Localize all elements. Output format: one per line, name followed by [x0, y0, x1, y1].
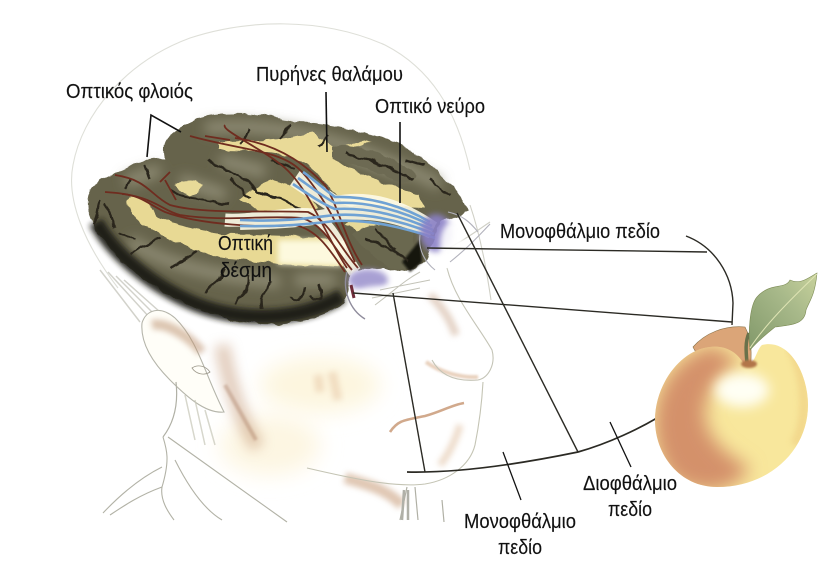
mouth: [390, 403, 464, 432]
stem hollow: [741, 360, 757, 368]
white matter: left finger: [175, 182, 412, 234]
eye socket sketch: [445, 205, 491, 300]
brain cross-section: [87, 113, 468, 324]
label: binocular field: Διοφθάλμιο: [583, 472, 677, 495]
head illustration: [72, 24, 493, 522]
label: optic tract: Οπτική: [218, 232, 273, 255]
inner gyrus: [333, 145, 418, 182]
dark eye hollow: [402, 240, 422, 272]
blue optic nerve fibres: [240, 172, 435, 238]
brain silhouette: [87, 113, 468, 324]
label: visual cortex: Οπτικός φλοιός: [66, 80, 193, 103]
label: thalamic nuclei: Πυρήνες θαλάμου: [256, 63, 403, 86]
back hump: [693, 327, 751, 370]
gyri highlights: [125, 127, 440, 282]
brown thalamic fibres: [105, 125, 362, 272]
leaf: [749, 273, 817, 350]
nose: [432, 268, 493, 380]
label: optic nerve: Οπτικό νεύρο: [375, 95, 485, 118]
visual field lines: [353, 213, 733, 472]
white matter: left lobe: [127, 197, 345, 268]
pale backing of projection fibres: [225, 178, 432, 272]
skin shading: [220, 295, 478, 505]
label: monocular field top: Μονοφθάλμιο πεδίο: [500, 220, 660, 243]
white matter: upper band: [217, 133, 424, 208]
stem: [746, 333, 749, 363]
back of head hatching: [100, 270, 160, 322]
label: monocular field bottom: πεδίο: [498, 536, 542, 559]
apple body: [655, 344, 808, 487]
dark lower rim: [96, 222, 342, 317]
white matter: inner lobe: [240, 180, 317, 213]
lower right lobe: [353, 224, 418, 270]
label pointers: [147, 92, 400, 203]
label: binocular field: πεδίο: [608, 498, 652, 521]
label: optic tract: [218, 232, 273, 282]
ear: [142, 310, 224, 412]
label: monocular field bottom: [464, 510, 576, 559]
label: binocular field: [583, 472, 677, 521]
central pale area: [278, 240, 342, 266]
collar: [103, 437, 287, 522]
sulci: [94, 125, 450, 308]
neck: [163, 382, 444, 522]
near eye: [346, 269, 430, 319]
label: optic tract: δέσμη: [220, 259, 272, 282]
tick lines: [503, 422, 631, 500]
far eye: [420, 212, 490, 270]
head outline: [72, 24, 470, 288]
label: monocular field bottom: Μονοφθάλμιο: [464, 510, 576, 533]
apple: [650, 273, 817, 495]
chin and jaw: [307, 382, 483, 485]
